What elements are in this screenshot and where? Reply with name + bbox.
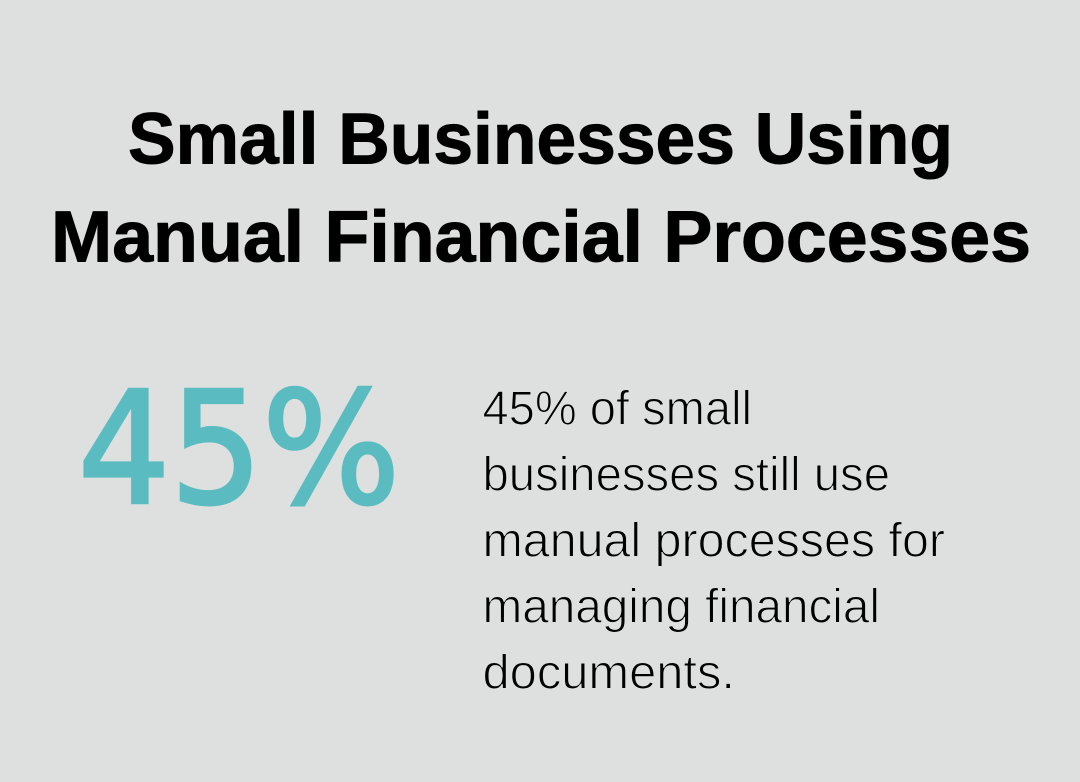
title: [51, 100, 1031, 278]
description text: documents.: [482, 646, 735, 700]
title: Small Businesses Using: [128, 100, 953, 180]
description text: manual processes for: [482, 514, 945, 568]
title: Manual Financial Processes: [51, 198, 1031, 278]
description text: 45% of small: [482, 382, 752, 436]
big statistic: 45%: 45%: [78, 358, 400, 540]
description text: [482, 382, 945, 700]
description text: managing financial: [482, 580, 880, 634]
description text: businesses still use: [482, 448, 890, 502]
